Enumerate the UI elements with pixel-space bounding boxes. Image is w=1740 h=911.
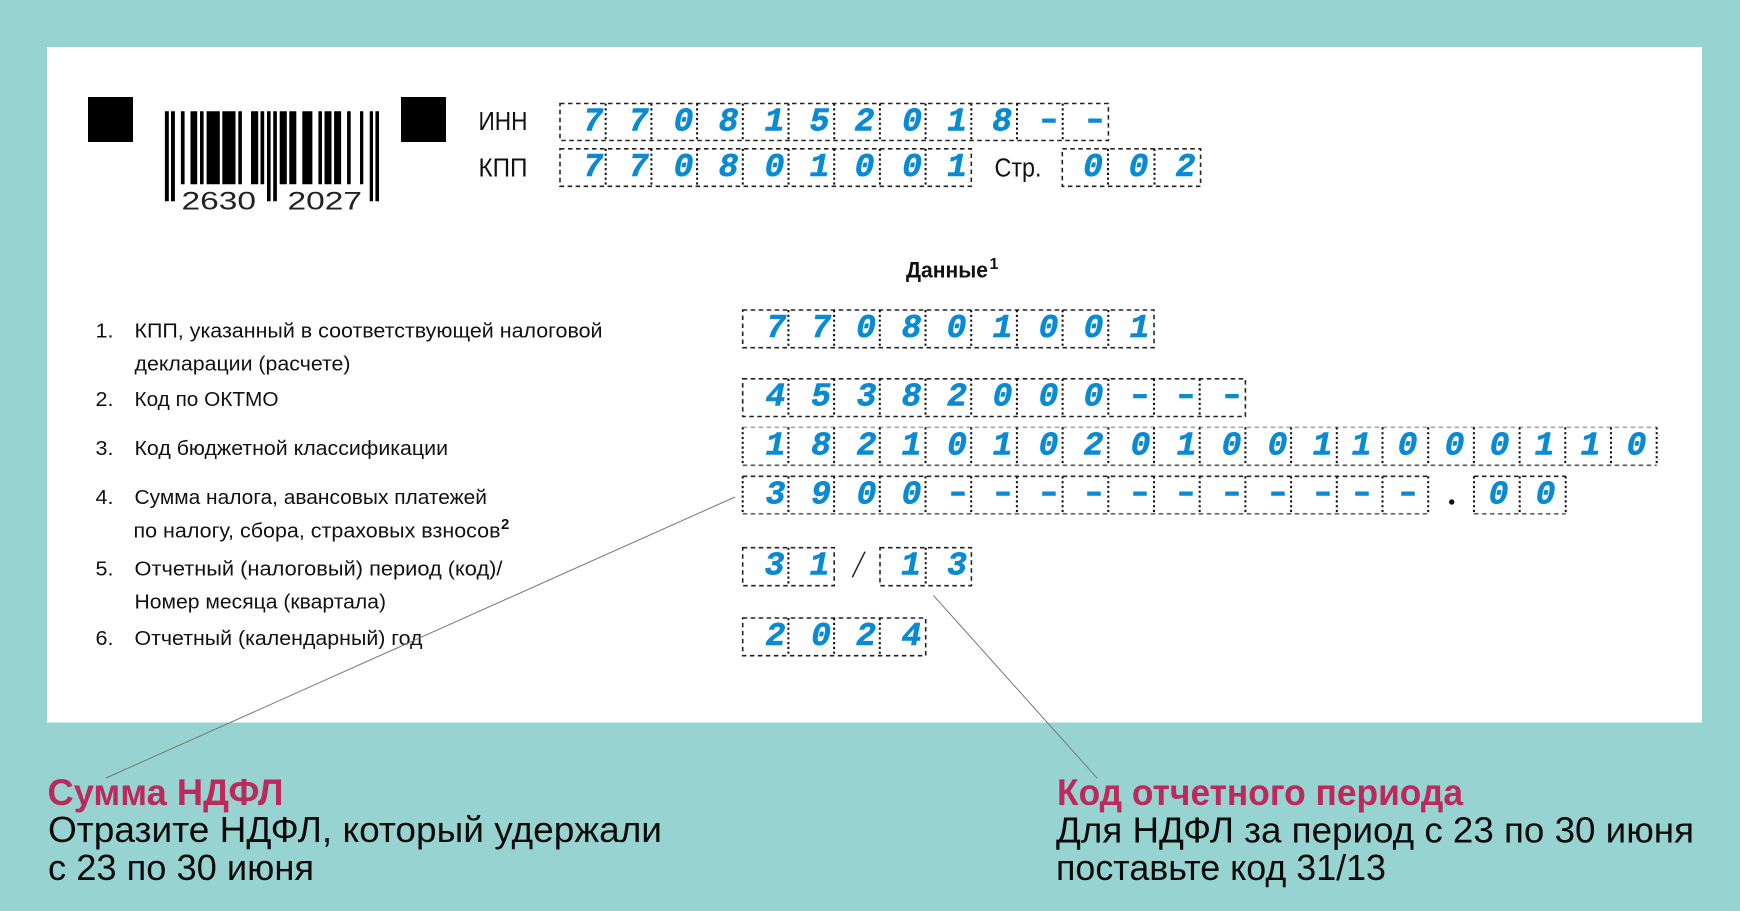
item 1: 1. (96, 320, 114, 342)
item 5: Номер месяца (квартала) (134, 591, 386, 613)
ИНН label: ИНН (478, 108, 528, 136)
item 6: 6. (96, 628, 114, 650)
callout: tax amount (48, 772, 662, 888)
callout: tax amount: с 23 по 30 июня (48, 847, 314, 888)
row 2 cells: ОКТМО: ––– (1132, 382, 1240, 412)
item 5: 5. (96, 559, 114, 581)
row 5 cells: period code: 31 (765, 548, 829, 585)
data heading: 1 (990, 256, 998, 273)
КПП cells: 770801001 (583, 149, 967, 186)
item 5 (96, 559, 503, 613)
item 4: 4. (96, 487, 114, 509)
item 4: по налогу, сбора, страховых взносов (134, 521, 501, 543)
row 1 cells: КПП: 770801001 (766, 310, 1149, 347)
item 1 (96, 320, 602, 376)
row 4 cells: tax amount: 00 (1489, 476, 1555, 513)
row 6 cells: year: 2024 (766, 618, 921, 655)
row 4 cells: tax amount: 3900 (766, 476, 921, 513)
item 1: КПП, указанный в соответствующей налоговой (134, 320, 602, 342)
row 2 cells: ОКТМО (743, 379, 1245, 416)
callout: period code: поставьте код 31/13 (1056, 847, 1386, 888)
field list (96, 320, 602, 650)
item 5: Отчетный (налоговый) период (код)/ (134, 559, 503, 581)
page label: Стр. (994, 155, 1042, 183)
data heading: Данные (906, 258, 988, 282)
barcode (165, 111, 379, 216)
item 2: Код по ОКТМО (134, 389, 278, 411)
callout: period code: Для НДФЛ за период с 23 по 30 июня (1056, 810, 1694, 850)
row 5 cells: period code: 13 (901, 548, 967, 585)
callout: period code: Код отчетного периода (1057, 772, 1463, 813)
callout: period code (1056, 772, 1694, 888)
row 4 cells: tax amount: ––––––––––– (950, 480, 1416, 510)
item 6: Отчетный (календарный) год (134, 628, 423, 650)
left black marker (88, 97, 133, 142)
item 3: Код бюджетной классификации (134, 438, 448, 460)
barcode: 2630 (182, 188, 256, 216)
item 2: 2. (96, 389, 114, 411)
panel: tax form (47, 47, 1702, 722)
row 2 cells: ОКТМО: 45382000 (766, 379, 1103, 416)
barcode: 2027 (288, 188, 362, 216)
callout: tax amount: Отразите НДФЛ, который удержали (48, 809, 662, 850)
item 4: Сумма налога, авансовых платежей (134, 487, 487, 509)
item 4 (96, 487, 509, 543)
item 1: декларации (расчете) (134, 354, 350, 376)
row 5 cells: period code (743, 548, 971, 586)
form header: markers and barcode (88, 97, 446, 216)
ИНН cells: 7708152018 (583, 104, 1012, 140)
right black marker (401, 97, 446, 142)
КПП label: КПП (478, 155, 528, 183)
ИНН cells: –– (1041, 106, 1103, 136)
row 3 cells: КБК: 18210102010011000110 (766, 427, 1646, 464)
page number cells: 002 (1083, 149, 1196, 186)
row 4 cells: tax amount (743, 476, 1566, 514)
callout: tax amount: Сумма НДФЛ (48, 772, 284, 813)
leader line: tax amount (106, 497, 735, 778)
item 3: 3. (96, 438, 114, 460)
item 4: 2 (501, 516, 509, 533)
leader line: period code (933, 595, 1097, 778)
